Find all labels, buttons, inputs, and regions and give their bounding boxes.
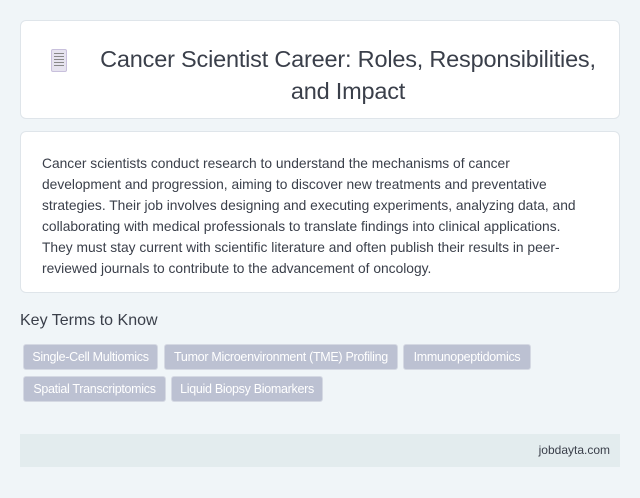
description text: reviewed journals to contribute to the advancement of oncology. (42, 261, 431, 276)
tag 4: Spatial Transcriptomics (33, 382, 156, 396)
key terms heading: Key Terms to Know (20, 312, 158, 329)
description text: They must stay current with scientific literature and often publish their results in peer- (42, 240, 560, 255)
tag 3 (403, 344, 531, 370)
tag 2: Tumor Microenvironment (TME) Profiling (174, 350, 388, 364)
description text (42, 156, 576, 276)
footer (20, 434, 620, 467)
description card (20, 131, 620, 293)
tag 5 (171, 376, 323, 402)
description text: Cancer scientists conduct research to understand the mechanisms of cancer (42, 156, 510, 171)
tag 1 (23, 344, 158, 370)
description text: collaborating with medical professionals to translate findings into clinical applications. (42, 219, 560, 234)
description text: development and progression, aiming to discover new treatments and preventative (42, 177, 547, 192)
title: Cancer Scientist Career: Roles, Responsibilities, and Impact (100, 46, 596, 104)
footer text: jobdayta.com (539, 443, 610, 457)
tag 3: Immunopeptidomics (414, 350, 520, 364)
icon: document (51, 49, 67, 72)
tag 1: Single-Cell Multiomics (32, 350, 149, 364)
tag 4 (23, 376, 166, 402)
tag 5: Liquid Biopsy Biomarkers (180, 382, 314, 396)
header card (20, 20, 620, 119)
tag 2 (164, 344, 398, 370)
description text: strategies. Their job involves designing and executing experiments, analyzing data, and (42, 198, 576, 213)
